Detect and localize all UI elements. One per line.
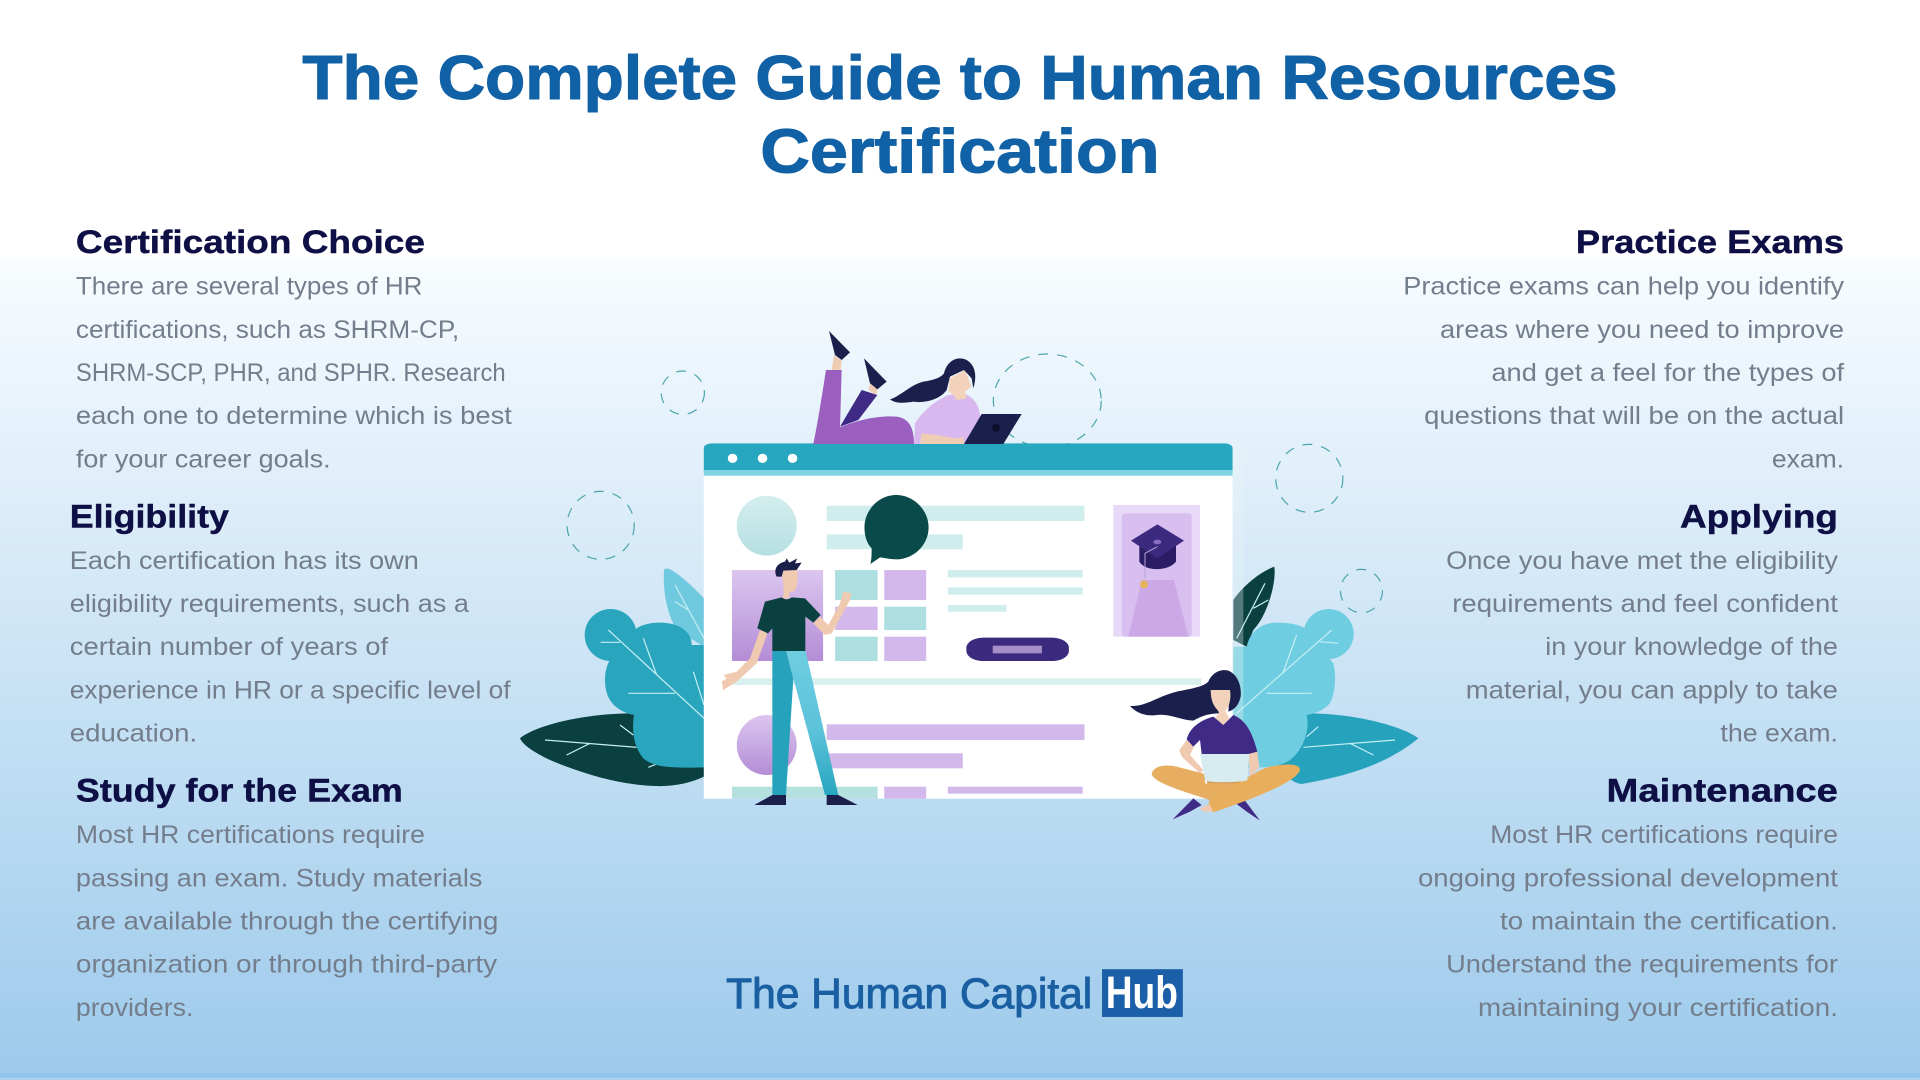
panel: study for the exam <box>76 773 498 1022</box>
right leaves <box>1233 567 1418 784</box>
panel: practice exams: areas where you need to improve <box>1440 316 1844 344</box>
panel: certification choice: each one to determine which is best <box>76 402 512 430</box>
panel: study for the exam: Study for the Exam <box>76 773 403 809</box>
decorative dashed circles <box>567 354 1382 613</box>
panel: certification choice: Certification Choice <box>76 224 425 260</box>
panel: certification choice <box>76 224 512 473</box>
panel: maintenance: Maintenance <box>1607 773 1838 809</box>
speech bubble <box>864 495 929 564</box>
panel: study for the exam: Most HR certifications require <box>76 821 425 849</box>
panel: eligibility: Eligibility <box>70 498 229 534</box>
top content row <box>737 496 797 556</box>
panel: practice exams: exam. <box>1772 445 1844 473</box>
panel: certification choice: certifications, such as SHRM-CP, <box>76 316 459 344</box>
person: woman sitting with laptop <box>1130 670 1300 821</box>
panel: eligibility <box>70 498 511 748</box>
panel: applying: material, you can apply to take <box>1466 676 1838 704</box>
panel: eligibility: experience in HR or a specific level of <box>70 676 511 704</box>
logo: The Human Capital Hub: Hub <box>1106 967 1178 1018</box>
panel: eligibility: education. <box>70 720 197 748</box>
panel: applying: the exam. <box>1720 720 1838 748</box>
panel: maintenance: Most HR certifications require <box>1490 821 1838 849</box>
panel: study for the exam: organization or through third-party <box>76 951 498 979</box>
panel: eligibility: Each certification has its own <box>70 547 419 575</box>
panel: study for the exam: providers. <box>76 994 193 1022</box>
button <box>966 638 1069 661</box>
panel: study for the exam: are available through the certifying <box>76 908 498 936</box>
panel: certification choice: There are several types of HR <box>76 273 422 301</box>
title <box>302 44 1618 187</box>
panel: applying <box>1446 498 1839 748</box>
panel: maintenance <box>1418 773 1838 1022</box>
title: The Complete Guide to Human Resources <box>302 44 1618 113</box>
panel: practice exams: Practice exams can help you identify <box>1403 273 1845 301</box>
panel: applying: Applying <box>1680 498 1838 534</box>
panel: certification choice: SHRM-SCP, PHR, and SPHR. Research <box>76 359 506 387</box>
lower content row <box>737 715 797 775</box>
panel: maintenance: ongoing professional development <box>1418 864 1838 892</box>
panel: maintenance: maintaining your certification. <box>1478 994 1838 1022</box>
illustration: website and people <box>520 331 1418 821</box>
person: man standing <box>722 558 858 805</box>
browser window <box>704 443 1243 799</box>
panel: applying: in your knowledge of the <box>1545 633 1838 661</box>
logo: The Human Capital Hub: The Human Capital <box>726 970 1092 1017</box>
panel: certification choice: for your career goals. <box>76 445 331 473</box>
panel: maintenance: to maintain the certification. <box>1500 908 1838 936</box>
panel: practice exams: questions that will be on the actual <box>1424 402 1844 430</box>
panel: study for the exam: passing an exam. Study materials <box>76 864 482 892</box>
panel: applying: Once you have met the eligibility <box>1446 547 1839 575</box>
panel: maintenance: Understand the requirements for <box>1446 951 1838 979</box>
panel: practice exams: and get a feel for the types of <box>1491 359 1844 387</box>
panel: eligibility: certain number of years of <box>70 633 388 661</box>
title: Certification <box>760 118 1160 187</box>
panel: applying: requirements and feel confident <box>1452 590 1838 618</box>
poster with graduation cap <box>1113 505 1200 637</box>
panel: eligibility: eligibility requirements, such as a <box>70 590 469 618</box>
left leaves <box>520 569 704 786</box>
image tile and grid <box>732 570 823 661</box>
panel: practice exams: Practice Exams <box>1576 224 1844 260</box>
panel: practice exams <box>1403 224 1845 473</box>
person: woman lying on top <box>813 331 1022 444</box>
divider <box>732 678 1201 685</box>
